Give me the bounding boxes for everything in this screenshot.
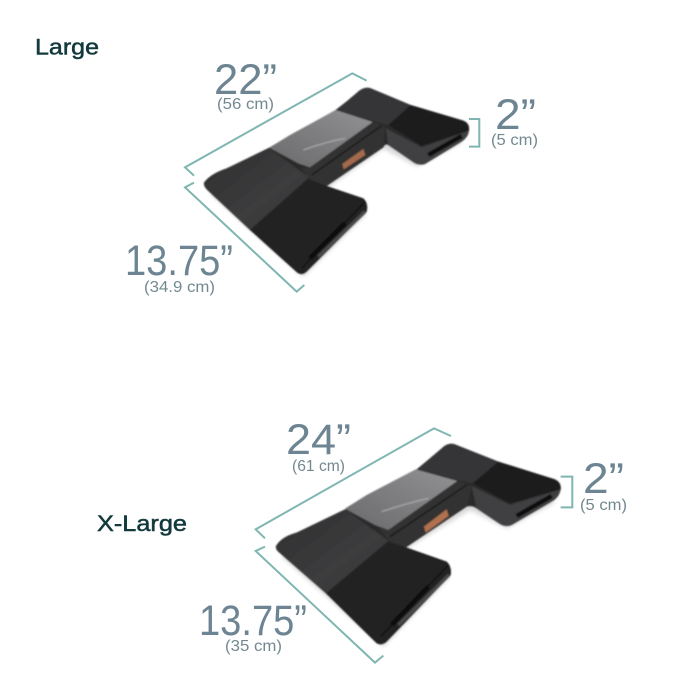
dimension: length 13.75 inches: 13.75” [125, 237, 233, 285]
right upper fabric panel [336, 88, 411, 125]
bracket: height [561, 477, 572, 507]
right lower flap [386, 128, 469, 165]
dimension: height 2 inches [491, 91, 538, 149]
heading: X-Large: X-Large [97, 511, 187, 536]
right mesh pocket [473, 462, 561, 503]
dimension: length 13.75 inches: 13.75” [199, 597, 307, 645]
leather tag [424, 509, 449, 533]
heading: Large: Large [35, 34, 99, 60]
lower strap [301, 122, 385, 186]
left upper fabric panel [276, 509, 388, 593]
right lower flap [472, 486, 561, 526]
clear window [345, 469, 457, 530]
dimension: height 2 inches: 2” [583, 455, 624, 503]
fold lines on left pocket end [302, 202, 365, 268]
dimension: height 2 inches [580, 455, 627, 514]
right mesh pocket [388, 105, 469, 146]
bracket: top width [185, 73, 367, 176]
dimension: height 2 inches: (5 cm) [491, 132, 538, 149]
left mesh pocket [250, 179, 367, 274]
bracket: side length [185, 183, 304, 292]
shadow [282, 487, 557, 647]
bracket: height [469, 119, 479, 147]
body of the product [204, 88, 469, 274]
fold lines on left pocket end [381, 565, 448, 637]
clear window [269, 110, 373, 167]
left mesh pocket [326, 542, 451, 644]
leather tag [342, 149, 365, 169]
silhouette [276, 444, 561, 644]
bracket: top width [256, 428, 451, 538]
dimension: length 13.75 inches: (35 cm) [225, 638, 282, 655]
dimension: height 2 inches: (5 cm) [580, 497, 627, 514]
bracket: side length [256, 547, 383, 663]
dimension: length 13.75 inches: (34.9 cm) [144, 279, 215, 296]
dimension: width 24 inches: (61 cm) [292, 458, 345, 475]
body of the product [276, 444, 561, 644]
dimension: width 22 inches: (56 cm) [217, 96, 274, 113]
shadow [210, 127, 463, 277]
dimension: height 2 inches: 2” [495, 91, 536, 139]
product photo: Large hand muff [185, 73, 479, 292]
right upper fabric panel [417, 444, 498, 483]
dimension: width 24 inches: 24” [286, 416, 351, 464]
product photo: X-Large hand muff [256, 428, 572, 663]
section: X-Large size diagram [199, 416, 627, 663]
dimension: width 22 inches: 22” [214, 56, 277, 104]
silhouette [204, 88, 469, 274]
left upper fabric panel [204, 148, 309, 230]
lower strap [378, 481, 472, 547]
section: Large size diagram [125, 56, 538, 296]
